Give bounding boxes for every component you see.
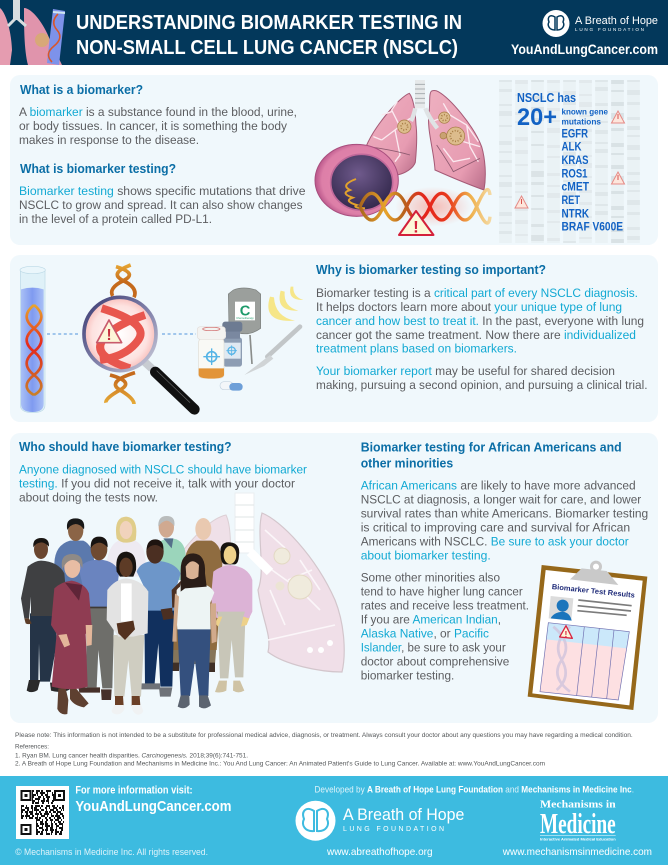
person: man in blue shirt	[78, 537, 119, 700]
illustration: chemotherapy bag	[228, 288, 261, 364]
person: blonde woman	[107, 517, 146, 577]
illustration: DNA strand behind magnifier	[106, 265, 135, 404]
logo: Mechanisms in Medicine: Interactive Animated Medical Education	[540, 836, 616, 842]
text: why important paragraph	[316, 286, 644, 356]
illustration: magnifying glass	[84, 297, 194, 409]
person: woman with long hair in white tee	[172, 553, 217, 708]
text: biomarker testing definition: Biomarker testing shows specific mutations that drive	[19, 184, 306, 198]
text: African Americans paragraph	[361, 478, 648, 562]
logo: A Breath of Hope footer: A Breath of Hope	[343, 805, 464, 824]
person: bald older man	[170, 518, 222, 672]
disclaimer and references: Please note: This information is not intended to be a substitute for professional medical advice, diagnosis, or treatment. Always consult your doctor about any questions you may have regarding a medical condition.	[15, 732, 633, 739]
text: other minorities paragraph: doctor about comprehensive	[361, 655, 510, 669]
illustration: chemotherapy bag: C	[240, 303, 251, 319]
icon: warning triangle in lens: !	[106, 327, 112, 344]
person: left man dark sweater	[21, 538, 70, 692]
disclaimer and references	[15, 732, 633, 768]
illustration: test tube with DNA	[20, 266, 45, 413]
list: gene names: ALK	[562, 142, 582, 154]
text: other minorities paragraph: Islander, be sure to ask your	[361, 641, 506, 655]
text: other minorities paragraph: tend to have higher lung cancer	[361, 585, 523, 599]
logo: A Breath of Hope: LUNG FOUNDATION	[575, 27, 644, 32]
illustration: scalpel	[244, 327, 300, 375]
text: why important paragraph: treatment plans based on biomarkers.	[316, 342, 517, 356]
logo: Mechanisms in Medicine: Mechanisms in	[540, 800, 616, 811]
illustration: lungs with tumors	[366, 80, 485, 190]
text: for more information: For more information visit:	[75, 784, 193, 796]
panel: why is biomarker testing important	[10, 255, 658, 422]
illustration: yellow crescents	[268, 287, 303, 321]
list: gene names: cMET	[562, 182, 589, 194]
developed by line: Developed by A Breath of Hope Lung Foundation and Mechanisms in Medicine Inc.	[314, 785, 634, 795]
icon: warning triangle	[560, 626, 572, 639]
panel: gene mutations list	[506, 80, 634, 243]
text: biomarker testing definition	[19, 184, 306, 226]
text: who should have testing: about doing the tests now.	[19, 490, 158, 504]
person: back man blue shirt	[54, 518, 94, 587]
text: biomarker definition: or body tissues. In cancer, it is something the body	[19, 119, 288, 133]
text: NSCLC has 20+: known gene	[562, 106, 608, 116]
text: African Americans paragraph: is critical to improving care and survival for African	[361, 520, 630, 534]
icon: warning triangle	[399, 211, 434, 236]
illustration: cancer cell	[315, 144, 398, 216]
text: biomarker report paragraph: Your biomarker report may be useful for shared decision	[316, 364, 615, 378]
text: who should have testing	[19, 462, 307, 504]
QR code	[16, 786, 69, 839]
logo: A Breath of Hope	[542, 10, 658, 37]
panel: who should have testing and minorities	[10, 433, 658, 723]
text: African Americans paragraph: Americans with NSCLC. Be sure to ask your doctor	[361, 534, 629, 548]
text: African Americans paragraph: NSCLC at diagnosis, a longer wait for care, and lower	[361, 492, 641, 506]
text: African Americans paragraph: survival rates than white Americans. Biomarker testing	[361, 506, 648, 520]
heading: African Americans and other minorities	[361, 440, 622, 470]
copyright: © Mechanisms in Medicine Inc. All rights reserved.	[15, 847, 208, 858]
text: why important paragraph: Biomarker testing is a critical part of every NSCLC diagnosis.	[316, 286, 638, 300]
list: gene names: EGFR	[562, 128, 589, 140]
list: gene names: NTRK	[562, 208, 590, 220]
heading: what is a biomarker: What is a biomarker?	[20, 82, 143, 97]
heading: African Americans and other minorities: Biomarker testing for African Americans and	[361, 440, 622, 455]
list: gene names: KRAS	[562, 155, 589, 167]
footer band	[0, 776, 668, 865]
illustration: faded lungs	[182, 493, 344, 672]
logo: A Breath of Hope footer	[296, 801, 464, 841]
icon: header lungs and test tube	[0, 0, 65, 65]
person: grey-haired man	[158, 516, 186, 580]
text: African Americans paragraph: African Americans are likely to have more advanced	[361, 478, 636, 492]
illustration: pill bottle	[197, 327, 225, 379]
title: UNDERSTANDING BIOMARKER TESTING IN	[76, 11, 462, 34]
text: other minorities paragraph: biomarker testing.	[361, 669, 454, 683]
logo: Mechanisms in Medicine: Medicine	[540, 809, 616, 840]
illustration: group of diverse people	[21, 516, 252, 715]
list: gene names: ROS1	[562, 168, 588, 180]
heading: why important: Why is biomarker testing so important?	[316, 262, 546, 277]
text: NSCLC has 20+: 20+	[517, 104, 557, 131]
text: NSCLC has 20+: mutations	[562, 116, 601, 126]
text: for more information	[75, 784, 231, 815]
text: why important paragraph: It helps doctors learn more about your unique type of lung	[316, 300, 622, 314]
text: why important paragraph: cancer got the same treatment. Now there are individualized	[316, 328, 636, 342]
disclaimer and references: References:	[15, 744, 49, 751]
text: biomarker definition	[19, 105, 297, 147]
text: for more information: YouAndLungCancer.com	[75, 798, 231, 815]
text: other minorities paragraph: rates and receive less treatment.	[361, 599, 529, 613]
results table	[540, 623, 629, 700]
heading: African Americans and other minorities: other minorities	[361, 456, 453, 470]
logo: A Breath of Hope: A Breath of Hope	[575, 15, 658, 27]
text: biomarker testing definition: NSCLC to grow and spread. It can also show changes	[19, 198, 302, 212]
text: other minorities paragraph: Alaska Native, or Pacific	[361, 627, 489, 641]
text: why important paragraph: cancer and how best to treat it. In the past, everyone with lung	[316, 314, 644, 328]
text: biomarker report paragraph: making, pursuing a second opinion, and pursuing a clinical trial.	[316, 378, 648, 392]
heading: who should have testing: Who should have biomarker testing?	[19, 439, 232, 454]
icons: small warning triangles	[515, 111, 624, 208]
illustration: clipboard with test results	[528, 561, 647, 710]
text: NSCLC has 20+: NSCLC has	[517, 91, 576, 105]
illustration: chemotherapy bag: Chemotherapy	[236, 316, 254, 320]
text: other minorities paragraph	[361, 571, 529, 683]
list: gene names	[562, 128, 623, 234]
person: elderly woman in red	[51, 554, 92, 714]
text: who should have testing: Anyone diagnosed with NSCLC should have biomarker	[19, 462, 307, 476]
illustration: pills	[220, 382, 243, 391]
icon: warning triangle: !	[413, 218, 419, 236]
text: biomarker testing definition: in the level of a protein called PD-L1.	[19, 212, 212, 226]
text: other minorities paragraph: Some other minorities also	[361, 571, 500, 585]
text: who should have testing: testing. If you did not receive it, talk with your doctor	[19, 476, 295, 490]
person: man in blue t-shirt	[137, 539, 182, 697]
text: biomarker report paragraph	[316, 364, 648, 392]
title	[76, 11, 462, 59]
patient avatar	[549, 596, 573, 621]
clipboard title: Biomarker Test Results	[551, 582, 635, 600]
header banner	[0, 0, 668, 65]
website: abreathofhope: www.abreathofhope.org	[326, 846, 433, 858]
text: biomarker definition: makes in response to the disease.	[19, 133, 199, 147]
list: gene names: RET	[562, 195, 580, 207]
panel: what is a biomarker	[10, 75, 658, 245]
illustration: mutated DNA helix	[360, 187, 490, 227]
website: mechanismsinmedicine: www.mechanismsinmedicine.com	[502, 846, 652, 858]
illustration: vial	[222, 322, 242, 367]
person: center woman in white cardigan	[107, 552, 148, 715]
text: NSCLC has 20+	[517, 91, 608, 131]
person: woman in lilac sweater	[211, 542, 252, 692]
clip	[570, 561, 618, 585]
title: NON-SMALL CELL LUNG CANCER (NSCLC)	[76, 36, 458, 59]
gel pattern	[506, 80, 634, 243]
icon: warning triangle: !	[565, 629, 568, 639]
connector: dotted lines	[47, 333, 196, 335]
text: other minorities paragraph: If you are American Indian,	[361, 613, 501, 627]
logo: A Breath of Hope footer: LUNG FOUNDATION	[343, 826, 444, 833]
heading: what is biomarker testing: What is biomarker testing?	[20, 161, 176, 176]
disclaimer and references: 1. Ryan BM. Lung cancer health disparities. Carcinogenesis. 2018;39(6):741-751.	[15, 752, 248, 759]
text: African Americans paragraph: about biomarker testing.	[361, 548, 491, 562]
list: gene names: BRAF V600E	[562, 222, 623, 234]
disclaimer and references: 2. A Breath of Hope Lung Foundation and Mechanisms in Medicine Inc.: You And Lung Cancer: An Animated Patient's Guide to Lung Cancer. Available at: www.YouAndLungCancer.com	[15, 761, 545, 768]
logo: Mechanisms in Medicine	[540, 800, 616, 842]
text: biomarker definition: A biomarker is a substance found in the blood, urine,	[19, 105, 297, 119]
